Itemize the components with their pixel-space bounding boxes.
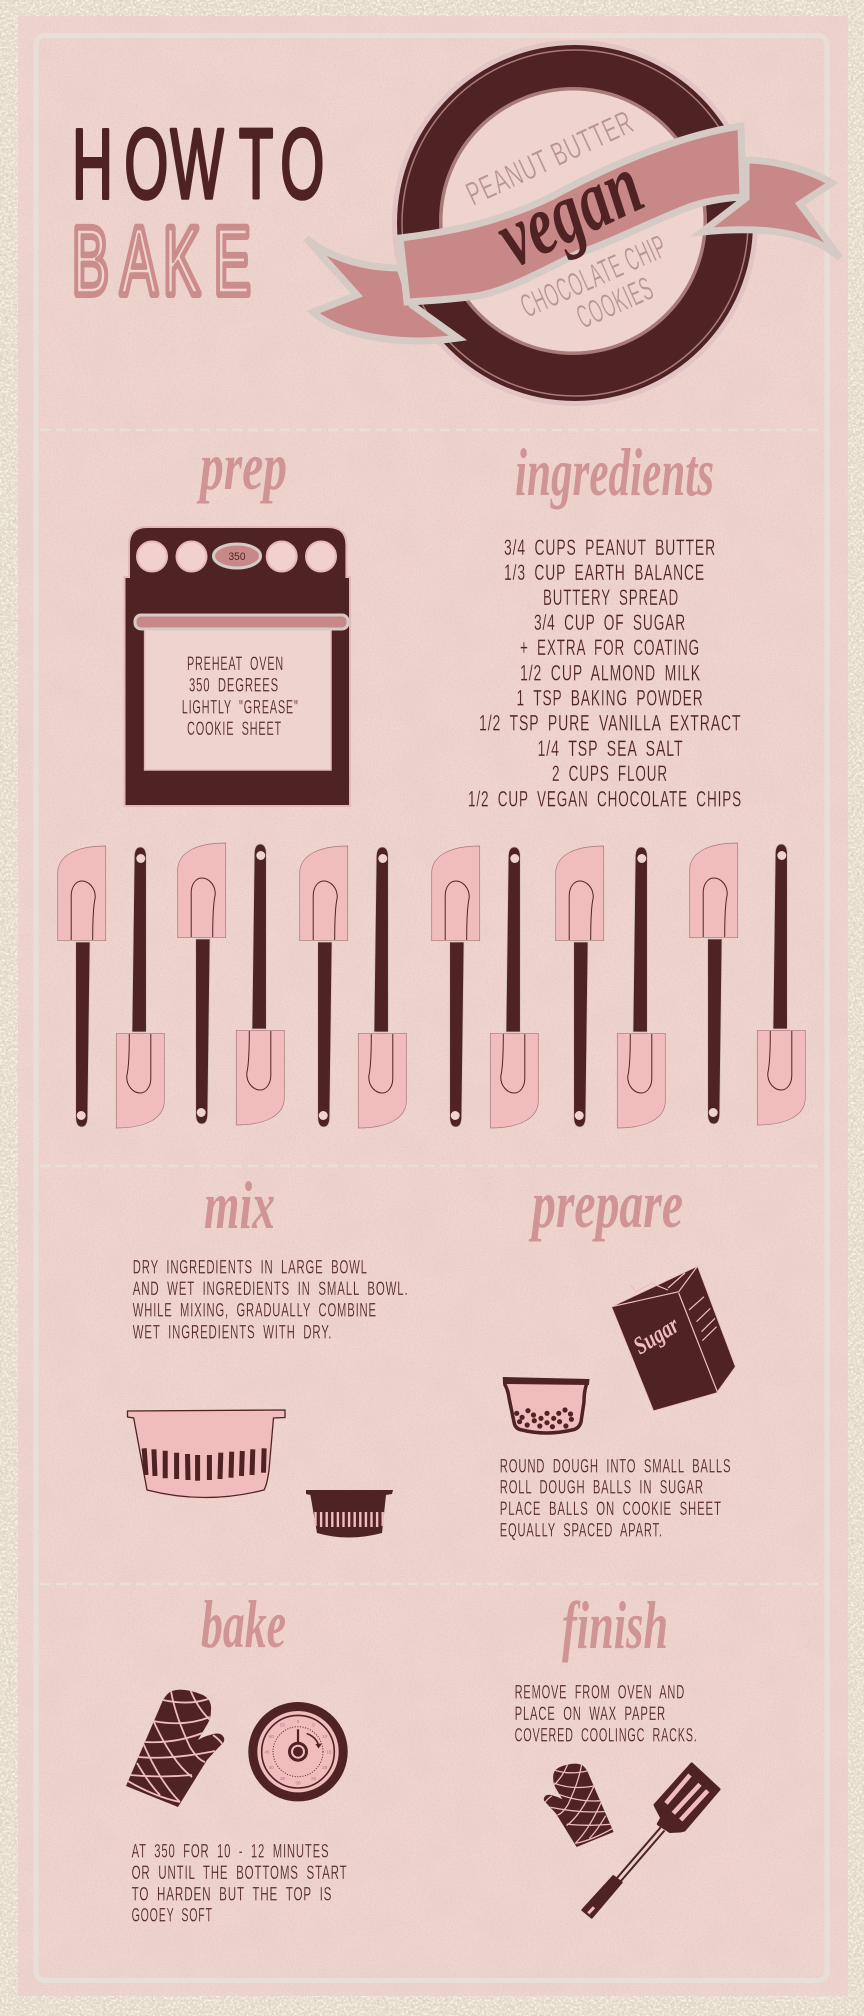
mix text: WET INGREDIENTS WITH DRY.	[133, 1322, 332, 1343]
finish text: COVERED COOLINGC RACKS.	[515, 1726, 698, 1747]
heading: prepare: prepare	[528, 1166, 683, 1242]
finish text: PLACE ON WAX PAPER	[515, 1704, 666, 1725]
ingredients list: 1/2 CUP ALMOND MILK	[520, 661, 701, 686]
timer numbers: 50	[269, 1734, 274, 1739]
icon: small oven mitt	[544, 1763, 614, 1847]
heading: ingredients: ingredients	[515, 434, 714, 510]
prep text: 350 DEGREES	[189, 676, 279, 697]
oven dial	[214, 544, 260, 568]
bake text: GOOEY SOFT	[132, 1906, 213, 1927]
timer numbers: 0	[297, 1719, 300, 1724]
timer numbers: 30	[295, 1780, 301, 1786]
badge text: chocolate chip: CHOCOLATE CHIP	[515, 227, 672, 324]
timer numbers: 5	[312, 1722, 315, 1728]
timer numbers: 20	[322, 1765, 328, 1770]
timer numbers: 10	[322, 1734, 328, 1739]
ingredients list: 1/4 TSP SEA SALT	[538, 736, 684, 761]
finish text: REMOVE FROM OVEN AND	[515, 1682, 685, 1703]
turner head	[655, 1764, 719, 1832]
bake text: TO HARDEN BUT THE TOP IS	[132, 1885, 332, 1906]
timer numbers: 55	[280, 1722, 285, 1728]
heading: bake: bake	[201, 1586, 286, 1662]
mix text: WHILE MIXING, GRADUALLY COMBINE	[133, 1301, 377, 1322]
badge: vegan cookies circle and ribbon	[306, 40, 840, 406]
timer numbers: 35	[280, 1776, 285, 1781]
prep text: LIGHTLY "GREASE"	[182, 697, 299, 718]
oven burners	[137, 542, 336, 572]
prepare text: ROLL DOUGH BALLS IN SUGAR	[500, 1477, 704, 1498]
prep text: COOKIE SHEET	[187, 719, 282, 740]
timer numbers: 25	[311, 1776, 316, 1781]
turner shaft	[617, 1827, 664, 1882]
icon: large oven mitt	[126, 1689, 224, 1807]
turner grip	[582, 1876, 622, 1918]
heading: prep: prep	[197, 428, 287, 504]
badge text: peanut butter: PEANUT BUTTER	[460, 103, 639, 212]
icon: spatula turner	[582, 1764, 719, 1918]
prepare text: EQUALLY SPACED APART.	[500, 1521, 663, 1542]
oven door window	[145, 628, 331, 770]
mix text: AND WET INGREDIENTS IN SMALL BOWL.	[133, 1279, 409, 1300]
icon: large bowl	[128, 1410, 285, 1498]
finish text	[515, 1682, 698, 1747]
title: bake: BAKE	[72, 209, 250, 314]
bake text: OR UNTIL THE BOTTOMS START	[132, 1863, 348, 1884]
turner slots	[666, 1775, 708, 1820]
ingredients list	[468, 535, 742, 812]
prepare text	[500, 1456, 731, 1542]
timer numbers: 15	[326, 1750, 332, 1754]
heading: finish: finish	[562, 1587, 668, 1663]
oven handle	[135, 615, 348, 629]
title: how to: HOW TO	[72, 110, 324, 220]
heading: mix: mix	[204, 1167, 275, 1243]
bake text	[132, 1841, 348, 1927]
timer numbers: 40	[269, 1765, 274, 1770]
oven dial: 350	[228, 551, 246, 563]
prep text: PREHEAT OVEN	[187, 654, 284, 675]
timer numbers: 45	[264, 1750, 270, 1754]
bake text: AT 350 FOR 10 - 12 MINUTES	[132, 1841, 329, 1862]
prepare text: PLACE BALLS ON COOKIE SHEET	[500, 1499, 722, 1520]
sugar label: Sugar	[629, 1312, 684, 1360]
title: bake: BAKE	[72, 209, 250, 314]
mix text	[133, 1257, 409, 1343]
badge ring	[392, 40, 758, 406]
icon: oven	[124, 527, 350, 806]
icon: sugar box	[611, 1266, 736, 1411]
ribbon main band	[400, 126, 743, 302]
icon: small bowl	[306, 1490, 393, 1538]
prep text	[182, 654, 299, 740]
ingredients list: 2 CUPS FLOUR	[552, 761, 668, 786]
ingredients list: 3/4 CUP OF SUGAR	[534, 610, 686, 635]
badge text: cookies: COOKIES	[571, 269, 659, 335]
ingredients list: 3/4 CUPS PEANUT BUTTER	[504, 535, 716, 560]
ingredients list: + EXTRA FOR COATING	[520, 635, 700, 660]
ribbon right tail	[702, 160, 840, 258]
icon: timer	[248, 1702, 348, 1801]
icon: dough bowl	[503, 1377, 590, 1433]
ribbon left tail	[306, 238, 458, 341]
mix text: DRY INGREDIENTS IN LARGE BOWL	[133, 1257, 368, 1278]
spatula row	[58, 843, 805, 1128]
ingredients list: 1 TSP BAKING POWDER	[516, 686, 704, 711]
ingredients list: 1/3 CUP EARTH BALANCE	[504, 560, 705, 585]
ingredients list: BUTTERY SPREAD	[543, 585, 679, 610]
timer numbers	[264, 1719, 332, 1786]
ribbon word: vegan: vegan	[481, 136, 656, 285]
